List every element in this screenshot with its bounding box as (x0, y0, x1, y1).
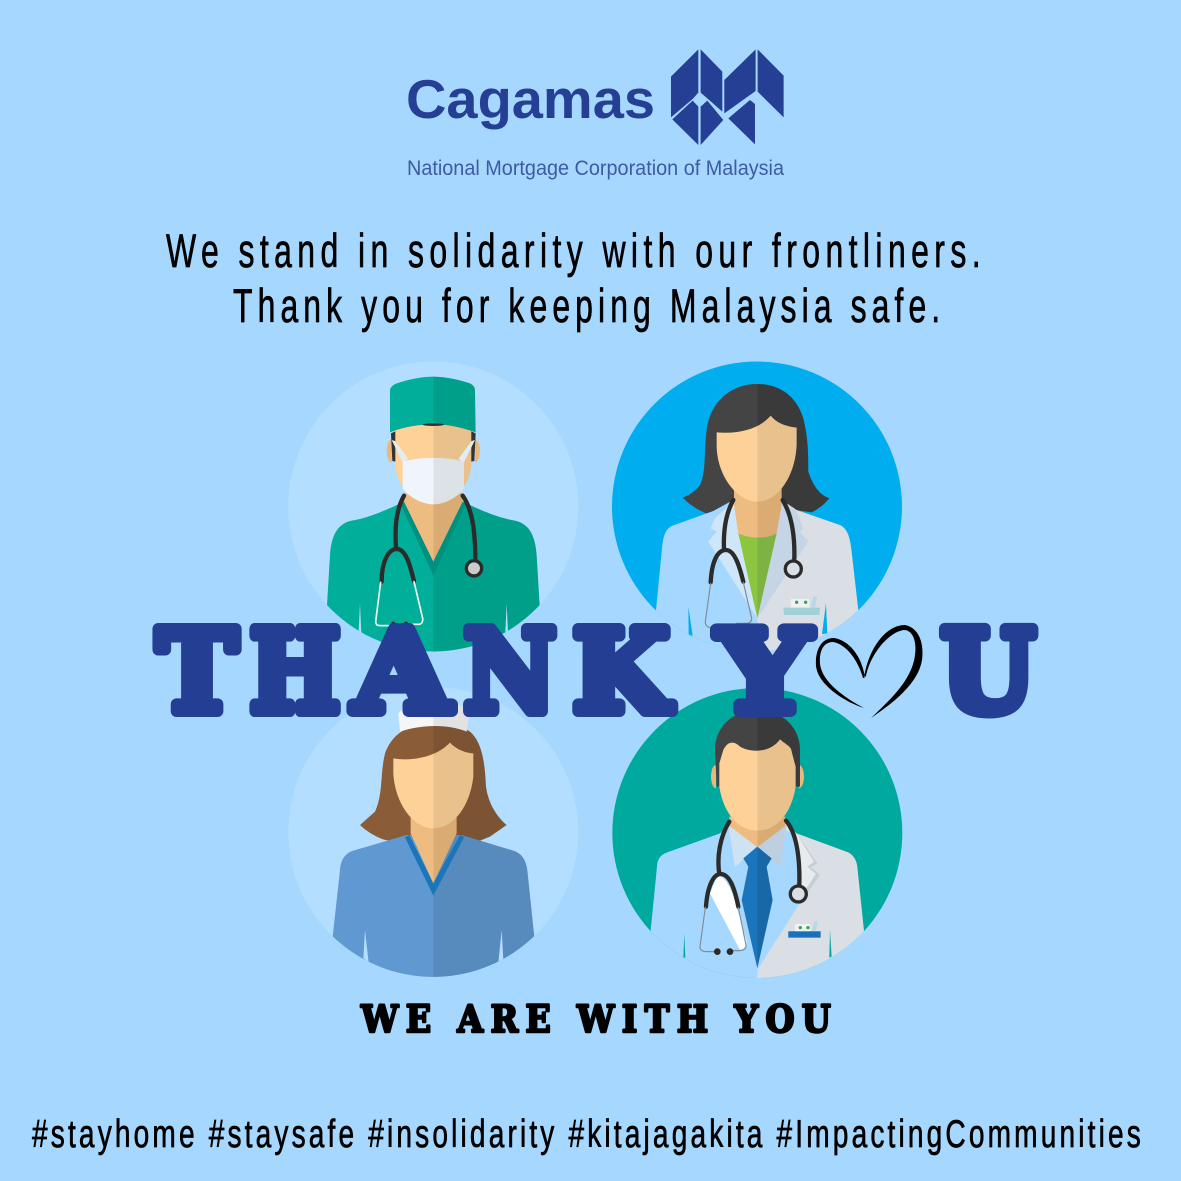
avatar: female doctor (612, 361, 902, 655)
male doctor circle (612, 688, 902, 978)
doctor stethoscope (705, 500, 801, 628)
male doctor face (719, 739, 796, 831)
avatar: nurse (288, 687, 578, 990)
heading: THANK YOU: A (353, 607, 452, 738)
male doctor lapel (797, 834, 820, 903)
surgeon scrubs (327, 502, 540, 655)
logo tagline: National Mortgage Corporation of Malaysia (407, 157, 784, 180)
heading: THANK YOU: Y (717, 607, 811, 738)
surgeon face (395, 425, 471, 504)
surgeon hairline (423, 423, 444, 426)
nurse cap (398, 700, 469, 732)
surgeon cap (390, 377, 476, 432)
avatar: surgeon (288, 361, 578, 655)
doctor circle (612, 361, 902, 651)
surgeon collar (401, 502, 466, 576)
heading: THANK YOU: T (157, 607, 237, 738)
doctor pocket (783, 597, 820, 615)
subheading: we are with you: WE ARE WITH YOU (360, 998, 831, 1041)
doctor face (717, 416, 797, 502)
heading: THANK YOU: U (941, 607, 1035, 738)
surgeon mask (403, 458, 464, 504)
nurse circle (288, 687, 578, 977)
male doctor stethoscope (700, 821, 806, 955)
nurse collar (405, 835, 464, 896)
avatar: male doctor (612, 688, 902, 990)
nurse face (393, 743, 473, 828)
male doctor neck (729, 817, 785, 847)
male doctor left panel (710, 876, 747, 950)
heading: THANK YOU (157, 607, 1035, 738)
doctor green shirt (738, 533, 777, 618)
male doctor tie (742, 847, 773, 968)
surgeon hair (391, 429, 476, 462)
male doctor pocket (788, 921, 821, 938)
male doctor hair (715, 710, 800, 787)
nurse neck (411, 813, 457, 883)
message line 2: Thank you for keeping Malaysia safe. (233, 280, 940, 333)
solidarity message (166, 225, 981, 333)
doctor neck (734, 488, 782, 538)
logo mark (671, 49, 784, 145)
heading: THANK YOU: H (250, 607, 340, 738)
surgeon circle (288, 361, 578, 651)
male doctor ears (711, 765, 804, 788)
male doctor coat (651, 823, 864, 990)
surgeon mask straps (392, 440, 475, 462)
logo wordmark: Cagamas (406, 68, 655, 130)
heading: THANK YOU: N (464, 607, 556, 738)
doctor lapels (708, 502, 757, 618)
doctor hair (683, 384, 829, 513)
nurse hair (360, 723, 507, 841)
male doctor shirt collar (728, 825, 757, 867)
surgeon neck (404, 493, 463, 563)
doctor coat (656, 500, 858, 655)
heading: THANK YOU: K (573, 607, 673, 738)
message line 1: We stand in solidarity with our frontliners. (166, 225, 981, 278)
logo: Cagamas (406, 49, 784, 180)
surgeon ears (387, 439, 480, 463)
nurse scrubs (333, 835, 534, 990)
surgeon stethoscope (376, 496, 482, 626)
icon: heart (816, 625, 922, 718)
hashtags: #stayhome #staysafe #insolidarity #kitajagakita #ImpactingCommunities (32, 1113, 1141, 1156)
